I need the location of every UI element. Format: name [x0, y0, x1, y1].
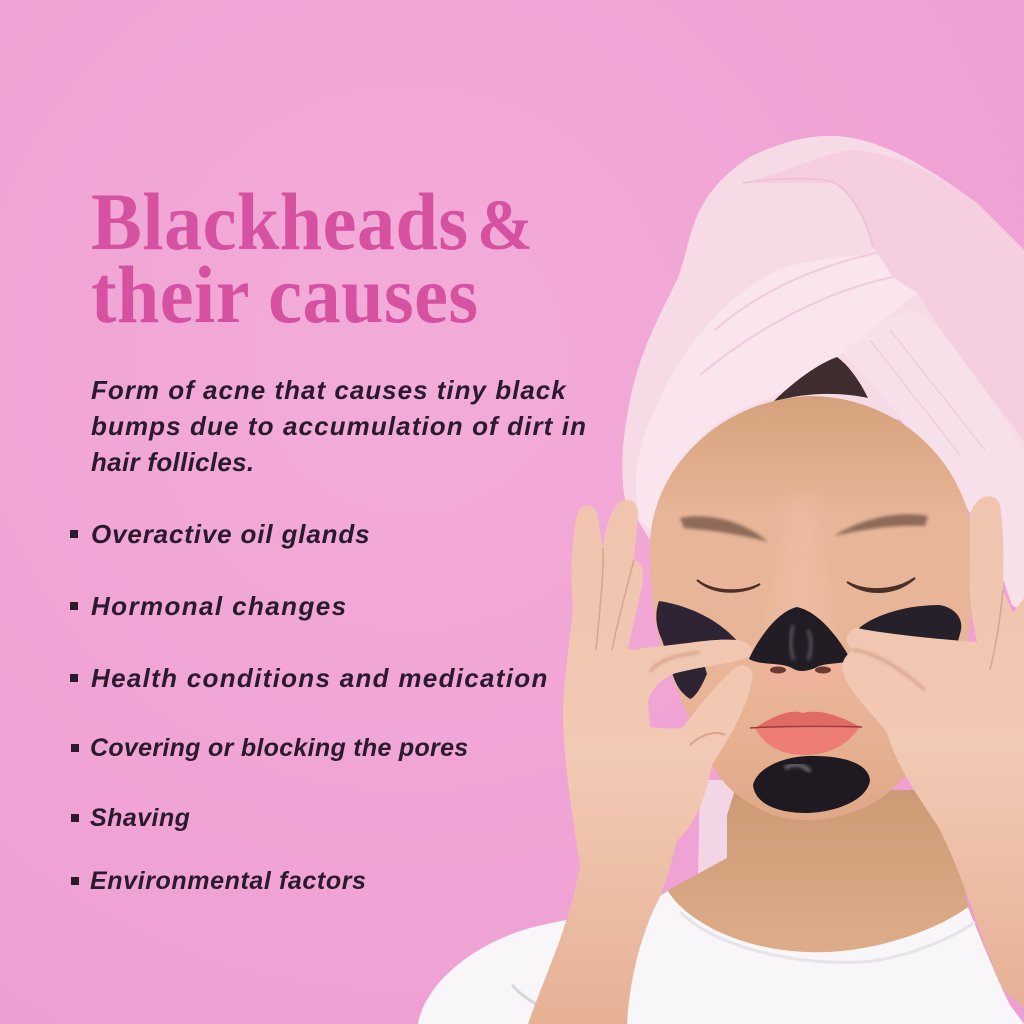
bullet: hormonal changes: Hormonal changes: [91, 591, 347, 621]
eyes: [697, 580, 760, 592]
bullet: shaving: Shaving: [90, 804, 190, 832]
nostrils: [760, 657, 845, 690]
intro text: bumps due to accumulation of dirt in: [91, 411, 587, 441]
towel right band: [843, 310, 1024, 612]
intro text: [91, 375, 587, 477]
bullet: covering pores: Covering or blocking the pores: [90, 734, 468, 762]
cheek strips: [656, 601, 738, 699]
nose highlight: [770, 500, 835, 650]
lips: [755, 712, 860, 728]
title: their causes: [91, 249, 479, 340]
title: Blackheads &: [91, 176, 533, 267]
intro text: Form of acne that causes tiny black: [91, 375, 567, 405]
left hand: [528, 500, 753, 1024]
hair: [773, 357, 868, 402]
bullet: health conditions: Health conditions and medication: [91, 663, 549, 693]
towel pink wrap: [743, 150, 1024, 440]
white shirt: [418, 891, 1024, 1024]
bullet: environmental factors: Environmental factors: [90, 867, 367, 895]
neck: [668, 790, 990, 960]
chin strip: [753, 756, 870, 813]
face: [650, 396, 975, 820]
intro text: hair follicles.: [91, 447, 254, 477]
towel: [622, 136, 1024, 612]
title: [91, 176, 533, 340]
bullet: overactive oil glands: Overactive oil glands: [91, 519, 370, 549]
nose strip: [749, 607, 851, 671]
towel fold roll: [636, 253, 917, 533]
eyebrows: [680, 516, 768, 542]
towel back fall: [698, 780, 735, 874]
bullet list of causes: [70, 519, 549, 895]
right hand: [842, 496, 1024, 1008]
